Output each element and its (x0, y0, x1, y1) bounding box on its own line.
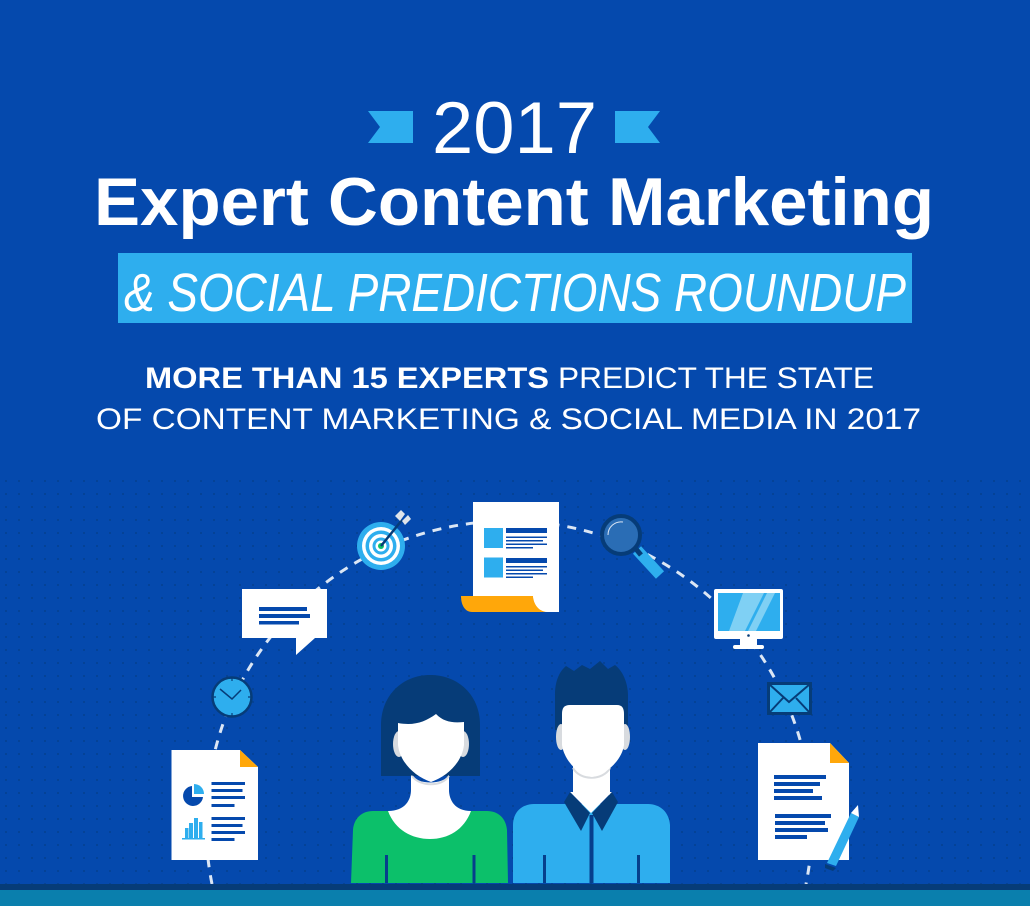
text block: description (96, 362, 921, 436)
icon: clock (212, 678, 252, 716)
figure: woman (351, 675, 508, 883)
text block: description: PREDICT THE STATE (558, 362, 874, 395)
icon: envelope (768, 684, 810, 714)
dashed arc (206, 521, 812, 884)
ribbon: right (615, 111, 660, 143)
text block: description: MORE THAN 15 EXPERTS (145, 362, 549, 395)
figure: man (513, 661, 670, 883)
title: main heading: Expert Content Marketing (94, 164, 934, 240)
icon: text document with pencil (758, 743, 859, 871)
icon: document with scroll (461, 502, 559, 612)
ribbon: left (368, 111, 413, 143)
icon: magnifier (602, 516, 660, 575)
banner: subtitle: & SOCIAL PREDICTIONS ROUNDUP (124, 263, 906, 323)
ground bar (0, 884, 1030, 906)
icon: chat bubble (242, 589, 327, 655)
icon: report document (172, 750, 258, 860)
text block: description: OF CONTENT MARKETING & SOCIAL MEDIA IN 2017 (96, 403, 921, 436)
title: year: 2017 (432, 88, 597, 169)
icon: target (357, 510, 411, 570)
icon: monitor (714, 589, 783, 649)
